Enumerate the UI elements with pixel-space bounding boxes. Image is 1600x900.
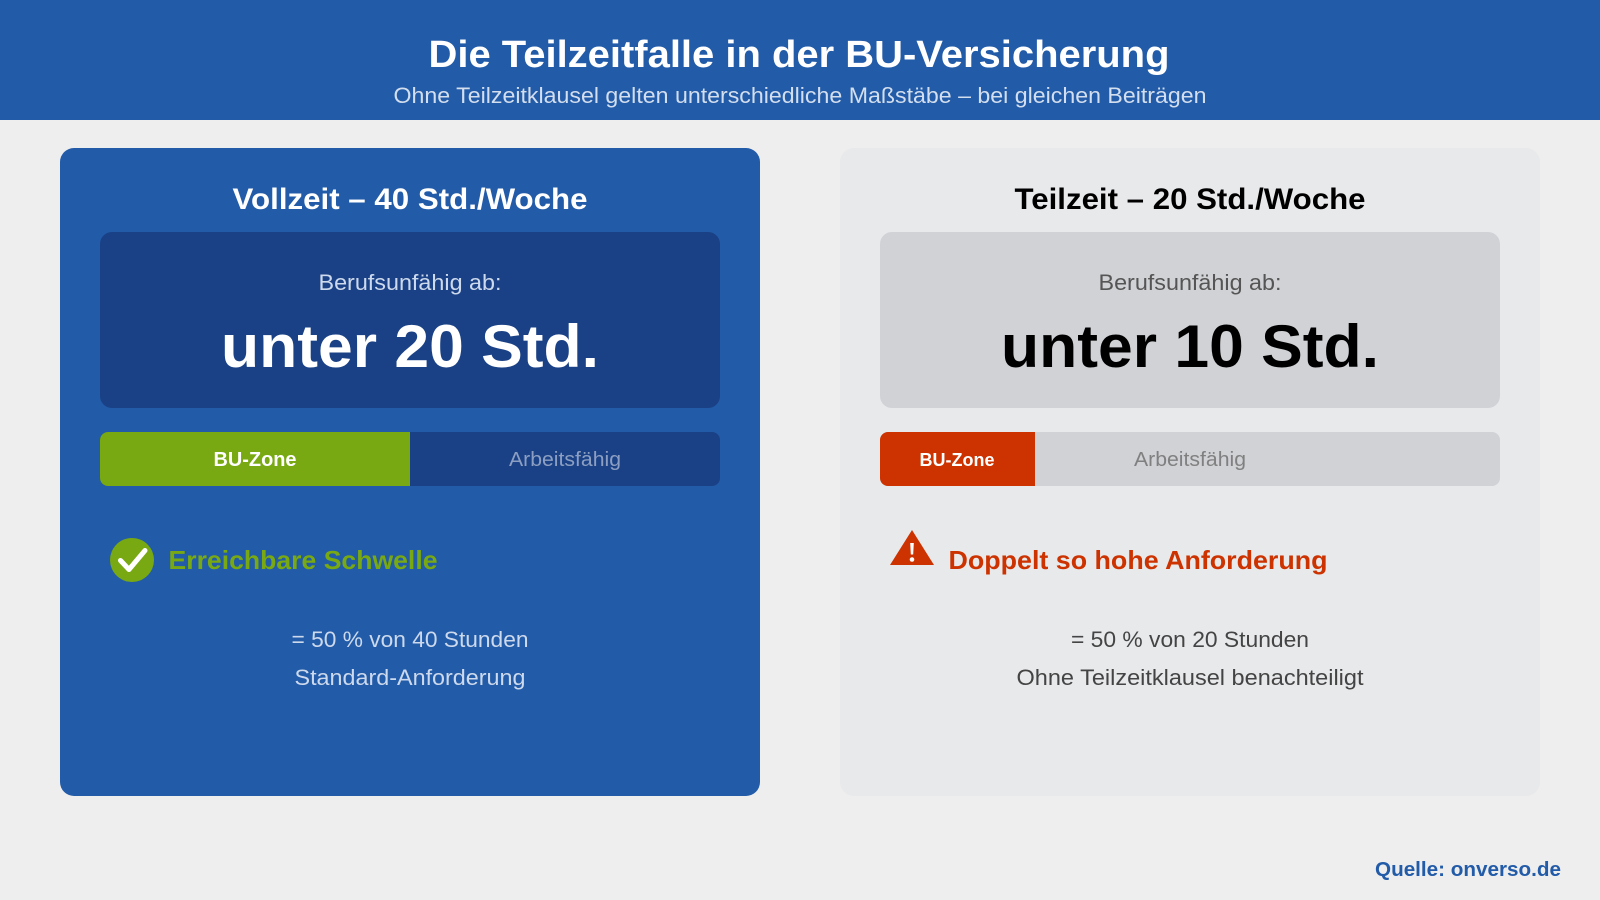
subtitle: Ohne Teilzeitklausel gelten unterschiedliche Maßstäbe – bei gleichen Beiträgen	[394, 83, 1206, 108]
title: Die Teilzeitfalle in der BU-Versicherung	[428, 34, 1170, 76]
hours bar: Teilzeit: Arbeitsfähig	[1134, 449, 1246, 471]
panel: Vollzeit	[60, 148, 760, 796]
threshold box: Teilzeit: unter 10 Std.	[1001, 313, 1379, 380]
hours bar: Vollzeit	[100, 432, 720, 486]
icon: warning triangle	[890, 530, 934, 565]
hours bar: Teilzeit: BU-Zone	[920, 450, 994, 470]
threshold box: Teilzeit: Berufsunfähig ab:	[1098, 270, 1282, 295]
source note: Quelle: onverso.de	[1375, 859, 1561, 881]
threshold box: Teilzeit	[880, 232, 1500, 408]
panel heading: Teilzeit: Teilzeit – 20 Std./Woche	[1014, 183, 1366, 216]
hours bar: Vollzeit: BU-Zone	[214, 449, 296, 471]
explanation: Vollzeit: Standard-Anforderung	[294, 665, 526, 690]
explanation: Teilzeit: = 50 % von 20 Stunden	[1071, 627, 1309, 652]
icon: check mark	[110, 538, 154, 582]
threshold box: Vollzeit: unter 20 Std.	[221, 313, 599, 380]
explanation: Teilzeit	[1016, 627, 1364, 690]
status label: Teilzeit: Doppelt so hohe Anforderung	[948, 545, 1328, 575]
header band	[0, 0, 1600, 120]
panel: Teilzeit	[840, 148, 1540, 796]
explanation: Teilzeit: Ohne Teilzeitklausel benachteiligt	[1016, 665, 1364, 690]
explanation: Vollzeit: = 50 % von 40 Stunden	[292, 627, 528, 652]
explanation: Vollzeit	[292, 627, 528, 690]
hours bar: Vollzeit: Arbeitsfähig	[509, 449, 621, 471]
panel heading: Vollzeit: Vollzeit – 40 Std./Woche	[232, 183, 588, 216]
status label: Vollzeit: Erreichbare Schwelle	[168, 545, 438, 575]
hours bar: Teilzeit	[880, 432, 1500, 486]
threshold box: Vollzeit: Berufsunfähig ab:	[318, 270, 502, 295]
threshold box: Vollzeit	[100, 232, 720, 408]
